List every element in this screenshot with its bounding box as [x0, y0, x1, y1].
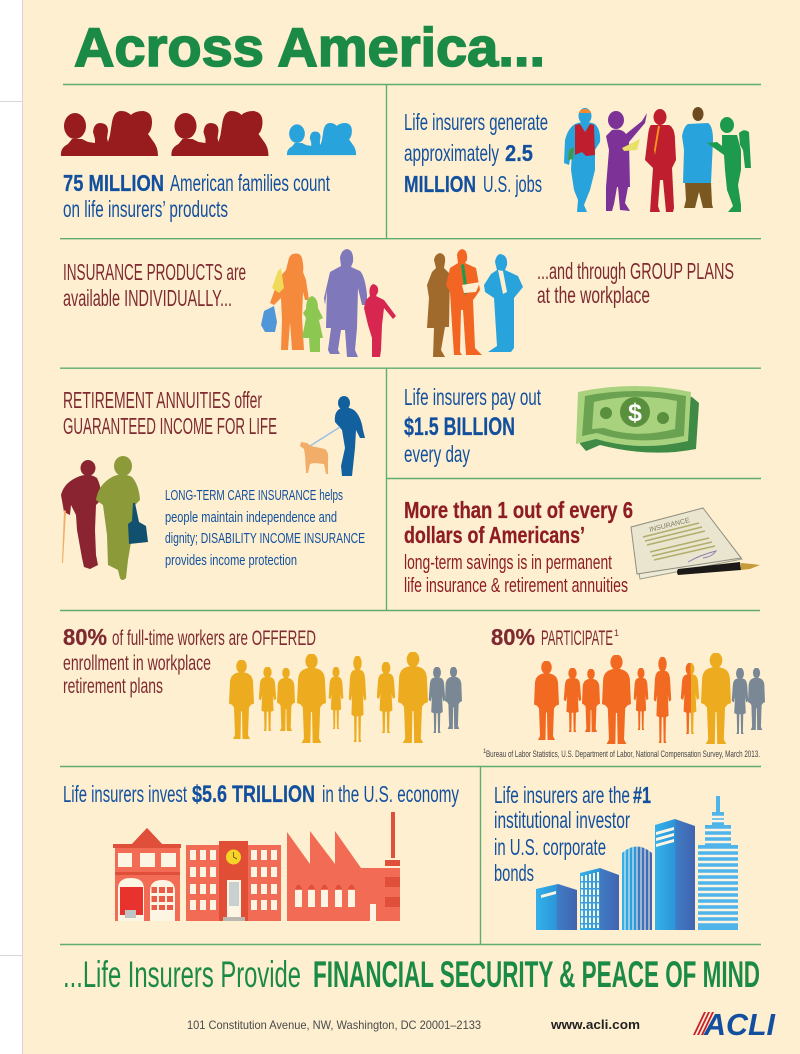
footer — [187, 1007, 776, 1042]
address: 101 Constitution Avenue, NW, Washington, DC 20001–2133 — [187, 1018, 481, 1032]
text: 80 percent offered: enrollment in workplace — [63, 652, 211, 675]
icon: blue family group — [287, 123, 356, 155]
text: long-term care: LONG-TERM CARE INSURANCE helps — [165, 487, 343, 504]
icon: red family groups — [61, 111, 269, 156]
icon: insurance document and pen — [631, 508, 760, 579]
text: 2.5 million jobs: MILLION — [404, 171, 476, 197]
text: 1 out of 6 dollars: dollars of Americans’ — [404, 522, 585, 548]
text: long-term care: provides income protection — [165, 552, 297, 569]
panel: offered — [63, 624, 462, 743]
panel: retirement annuities — [61, 387, 365, 580]
text: 2.5 million jobs — [404, 109, 548, 197]
text: 1.5 billion: $1.5 BILLION — [404, 413, 515, 441]
text: number one investor: bonds — [494, 860, 534, 886]
tagline: ...Life Insurers Provide — [63, 954, 301, 995]
text: group plans: at the workplace — [537, 282, 650, 308]
text: group plans — [537, 258, 734, 308]
icon: elderly couple — [61, 456, 148, 580]
panel: families — [61, 111, 356, 222]
icon: crowd of workers offered — [229, 651, 462, 743]
icon: school with clock tower — [186, 841, 281, 921]
tower 3 — [622, 846, 652, 930]
website: www.acli.com — [550, 1017, 640, 1032]
icon: insurance document and pen: INSURANCE — [649, 517, 691, 534]
text: number one investor: in U.S. corporate — [494, 834, 606, 860]
text: 2.5 million jobs: approximately — [404, 140, 499, 166]
brown woman — [427, 253, 450, 357]
text: 75 million families: American families count — [170, 170, 330, 196]
text: individual products: available INDIVIDUALLY... — [63, 285, 232, 311]
man — [324, 249, 367, 357]
icon: family of four — [261, 249, 396, 357]
text: 5.6 trillion: in the U.S. economy — [322, 781, 459, 807]
yellow bag — [272, 268, 284, 293]
worker: doctor in lab coat — [682, 107, 713, 208]
text: 5.6 trillion — [63, 781, 459, 808]
icon: firehouse — [113, 828, 181, 921]
panel: individual products — [63, 249, 396, 357]
tower 1 — [536, 884, 577, 930]
logo: ACLI: ACLI — [703, 1007, 776, 1042]
title: Across America... — [74, 16, 545, 78]
icon: factory — [287, 812, 400, 921]
text: 5.6 trillion: $5.6 TRILLION — [192, 781, 315, 808]
icon: man walking dog — [300, 396, 365, 476]
text: individual products — [63, 259, 246, 311]
girl — [302, 296, 323, 352]
icon: three coworkers — [427, 249, 523, 357]
text: 80 percent offered: retirement plans — [63, 675, 163, 698]
tagline — [63, 954, 760, 995]
worker: woman with tablet — [606, 111, 647, 211]
worker: construction — [564, 108, 600, 212]
text: 80 percent offered — [63, 624, 316, 698]
text: 75 million families: on life insurers’ products — [63, 196, 228, 222]
text: long-term care: people maintain independence and — [165, 509, 337, 526]
panel: group plans — [427, 249, 734, 357]
blue bag — [261, 306, 277, 332]
panel: participate — [483, 624, 765, 760]
text: retirement annuities: GUARANTEED INCOME FOR LIFE — [63, 413, 277, 439]
text: 1.5 billion: Life insurers pay out — [404, 384, 541, 410]
blue man — [484, 254, 523, 352]
text: 1.5 billion — [404, 384, 541, 467]
icon: stack of dollars — [576, 386, 699, 453]
text: number one investor — [494, 782, 651, 886]
text: 75 million families — [63, 170, 330, 222]
text: number one investor: #1 — [633, 782, 651, 808]
text: 2.5 million jobs: 2.5 — [505, 140, 533, 166]
text: individual products: INSURANCE PRODUCTS are — [63, 259, 246, 285]
panel: jobs — [404, 107, 751, 212]
text: 80 percent participate: 1 — [614, 628, 619, 638]
text: retirement annuities: RETIREMENT ANNUITIES offer — [63, 387, 262, 413]
text: 1 out of 6 dollars: More than 1 out of every 6 — [404, 497, 633, 523]
text: 2.5 million jobs: Life insurers generate — [404, 109, 548, 135]
crop edge marks — [0, 0, 22, 1054]
tower 4 — [655, 819, 695, 930]
text: 80 percent participate: 80% — [491, 624, 535, 650]
panel: long-term savings — [404, 497, 760, 597]
text: number one investor: institutional investor — [494, 807, 630, 833]
text: 80 percent offered: 80% — [63, 624, 107, 650]
tower 2 — [580, 868, 619, 930]
orange man — [446, 249, 482, 355]
text: 80 percent offered: of full-time workers are OFFERED — [112, 627, 316, 650]
text: 5.6 trillion: Life insurers invest — [63, 781, 187, 807]
text: 1 out of 6 dollars: long-term savings is in permanent — [404, 552, 612, 574]
text: 1 out of 6 dollars — [404, 497, 633, 597]
panel grid lines — [60, 84, 761, 944]
boy — [364, 284, 396, 357]
text: 80 percent participate — [491, 624, 619, 650]
text: long-term care — [165, 487, 365, 569]
panel: daily payout — [404, 384, 699, 467]
icon: skyline — [536, 796, 738, 930]
icon: stack of dollars: $ — [628, 399, 642, 427]
text: 75 million families: 75 MILLION — [63, 170, 164, 196]
text: 1 out of 6 dollars: life insurance & retirement annuities — [404, 575, 628, 597]
icon: crowd of workers participating — [534, 652, 765, 744]
text: 1.5 billion: every day — [404, 441, 470, 467]
text: number one investor: Life insurers are the — [494, 782, 630, 808]
text: retirement annuities — [63, 387, 277, 439]
panel: corporate bonds — [494, 782, 738, 930]
worker: man in suit — [645, 109, 676, 212]
footnote: 1 — [483, 749, 487, 755]
icon: five workers — [564, 107, 751, 212]
woman with bags — [270, 254, 309, 350]
worker: woman hiker — [707, 117, 751, 212]
panel: invest — [63, 781, 459, 921]
text: 2.5 million jobs: U.S. jobs — [483, 171, 542, 197]
text: long-term care: dignity; DISABILITY INCOME INSURANCE — [165, 530, 365, 547]
tower 5 — [698, 796, 738, 930]
text: 80 percent participate: PARTICIPATE — [541, 627, 613, 650]
